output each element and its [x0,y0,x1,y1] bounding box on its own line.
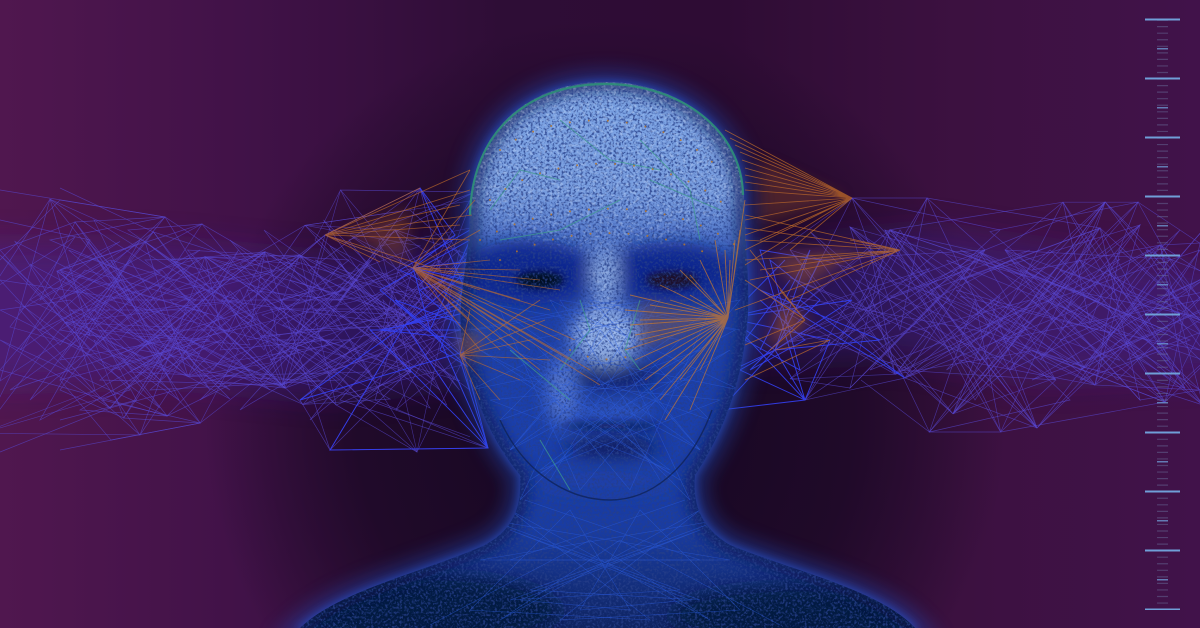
blue scribble threads [430,300,780,625]
head figure [280,70,940,628]
ruler highlighted ticks [1157,48,1168,610]
network: bright blue web near head [300,188,905,450]
network: left purple web [0,188,488,452]
orange haze patches [345,160,860,365]
ruler major ticks [1145,18,1180,610]
network: right purple web [775,198,1200,432]
head outline [470,84,743,215]
green threads [490,120,720,490]
head glow [300,82,915,628]
jaw line [500,410,712,500]
network: soft band glow [0,230,1200,395]
orange fan: upper right hub [725,130,900,380]
edge vignette [300,82,915,628]
eyes [516,272,698,429]
ruler scale at right [1157,18,1168,610]
orange wedge glow at right hub [640,300,728,350]
face shading [300,240,930,628]
orange fan: right cheek hub [625,200,745,420]
thread texture [280,70,940,628]
head base fill [280,70,940,628]
ruler minor ticks [1157,20,1168,610]
orange fan: left hub [325,170,600,400]
orange node dots [480,120,735,359]
light thread highlights [472,82,744,368]
